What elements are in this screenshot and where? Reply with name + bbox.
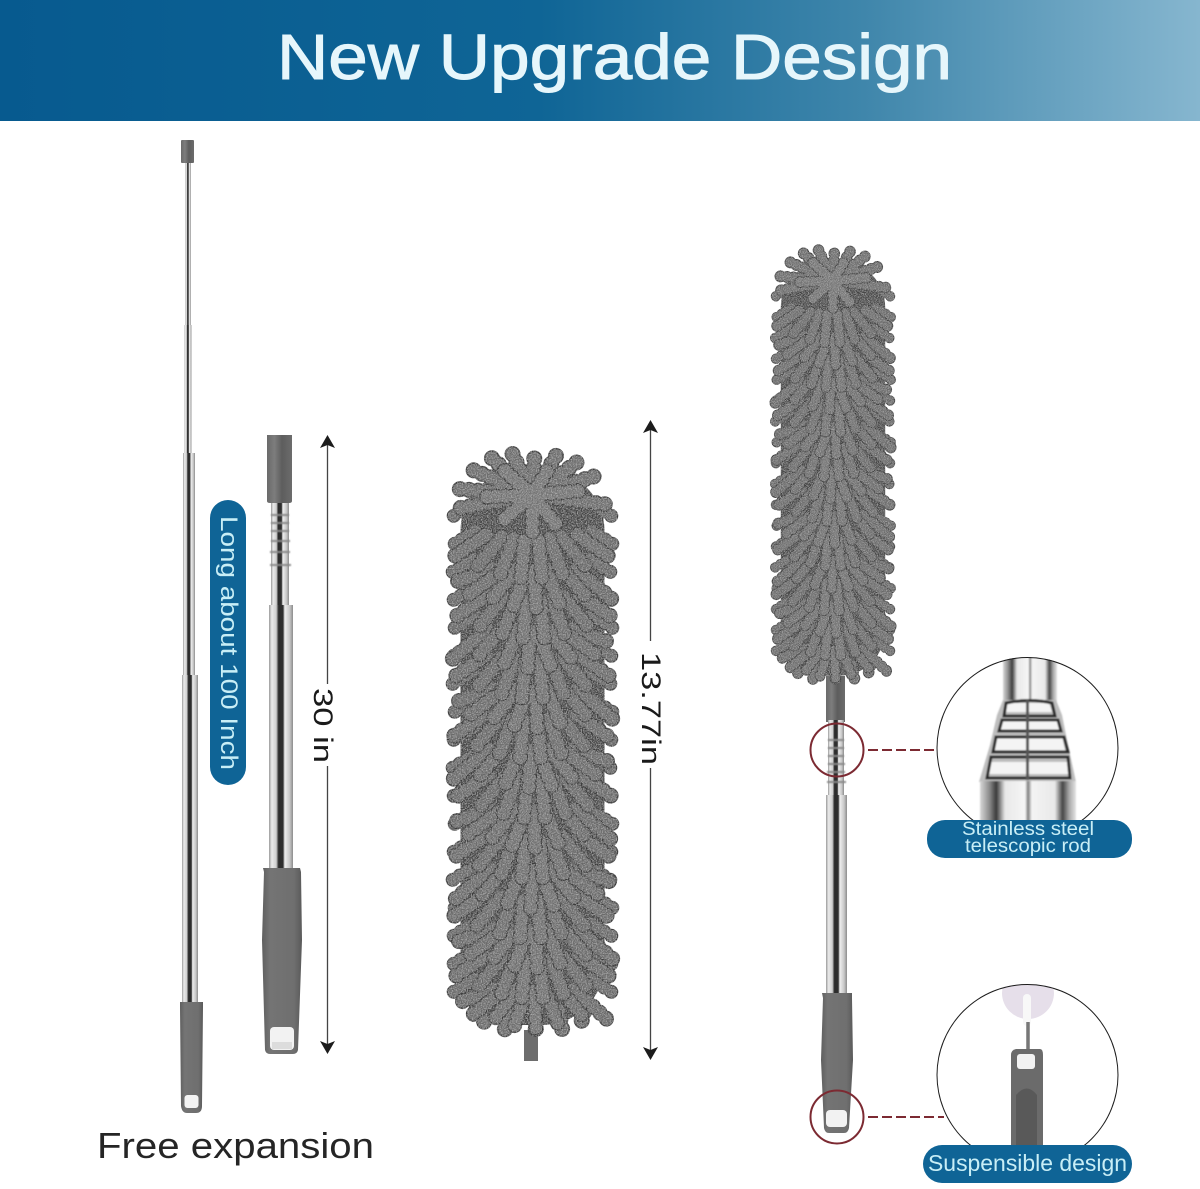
callout: suspensible handle zoom [810,967,1132,1183]
grip [821,993,853,1133]
pill: long about 100 inch [210,500,246,785]
dimension arrow: 30 in [308,435,338,1054]
label: 30 in: 30 in [308,688,338,763]
red marker circle [810,724,864,776]
magnified rod [978,657,1076,820]
title: New Upgrade Design [277,21,952,93]
callout: telescopic rod zoom [810,650,1132,858]
label pill [923,1145,1132,1183]
neck [826,676,845,722]
head [771,250,895,683]
collapsed telescopic rod [262,435,302,1054]
magnified hanging handle [1002,985,1054,1145]
fully extended telescopic rod [180,140,203,1113]
label pill [927,819,1132,858]
threaded stud [524,1030,538,1061]
label pill: telescopic rod [965,836,1091,857]
pill: long about 100 inch: Long about 100 Inch [215,516,242,770]
label: 13.77in: 13.77in [636,652,666,765]
dimension arrow: 13.77 in [636,420,666,1060]
header banner [0,0,1200,121]
label pill: Stainless steel [962,819,1094,840]
red marker circle [810,1090,864,1144]
assembled duster [771,250,895,1133]
caption: free expansion: Free expansion [97,1125,374,1166]
large duster head [448,454,618,1061]
rod [828,720,844,796]
label pill: Suspensible design [928,1150,1127,1176]
